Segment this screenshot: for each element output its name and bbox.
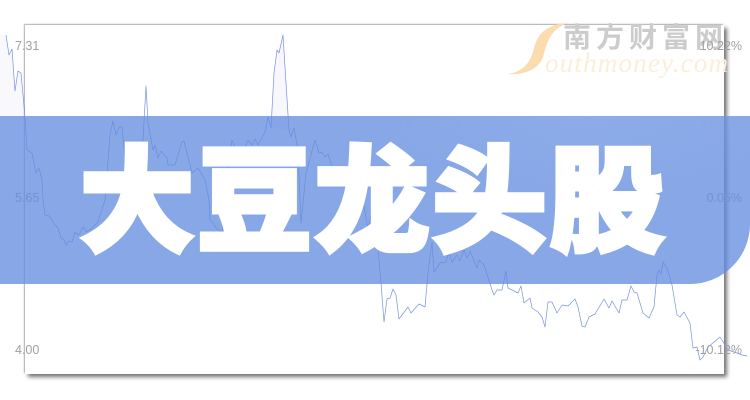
axis label: left bottom: 4.00 <box>15 343 39 357</box>
axis label: right middle: 0.05% <box>707 191 742 205</box>
axis label: left top: 7.31 <box>15 39 39 53</box>
axis label: right bottom: -10.12% <box>695 343 742 357</box>
watermark logo: southmoney <box>508 16 728 78</box>
title band <box>0 116 750 284</box>
watermark logo: southmoney: 南方财富网 <box>563 16 723 56</box>
axis label: right top: 10.22% <box>700 39 742 53</box>
watermark logo: southmoney: outhmoney.com <box>545 48 728 78</box>
title: 大豆龙头股 <box>80 110 668 275</box>
axis label: left middle: 5.65 <box>15 191 39 205</box>
